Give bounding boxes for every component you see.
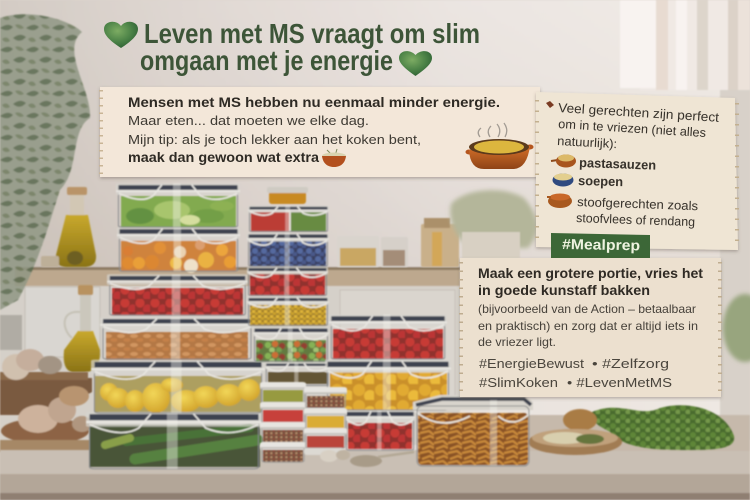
garlic and spoon [320, 450, 414, 467]
tips text: pastasauzen [579, 155, 656, 173]
icon: small bowl [322, 149, 346, 167]
oil bottle on shelf [41, 187, 96, 267]
container: oranges [117, 227, 240, 273]
intro text [128, 95, 500, 165]
containers: middle stack [325, 314, 533, 466]
container: red and green [248, 206, 329, 231]
icon: pasta sauce [551, 154, 576, 168]
container: yellow peas [247, 297, 329, 326]
hashtags: #SlimKoken [479, 375, 558, 390]
container: red fruit [247, 267, 328, 295]
tips text: stoofvlees of rendang [576, 211, 695, 229]
panel: intro note [100, 87, 540, 177]
panel: freezer tips [536, 92, 738, 250]
container: lasagna [413, 395, 533, 466]
herbs, onion and board [528, 405, 734, 455]
small round jars [260, 382, 414, 467]
icon: stew dish [547, 194, 572, 208]
icon: steaming pot [466, 123, 534, 169]
garlic and onions on wood [0, 349, 92, 452]
jar column right [304, 387, 347, 455]
advice body: de vriezer ligt. [478, 335, 556, 349]
container: mixed vegetables [253, 327, 329, 362]
advice heading [478, 266, 704, 298]
title line 2: omgaan met je energie [140, 45, 393, 76]
container: strawberries [329, 314, 447, 359]
plant: left tree [0, 14, 90, 350]
oil jug on cabinet [64, 285, 100, 372]
container: golden vegetables [325, 360, 451, 410]
container: lemons [91, 360, 265, 413]
advice body [478, 302, 698, 349]
tag: Mealprep: #Mealprep [562, 237, 640, 254]
container: strawberries low [345, 410, 415, 450]
title line 1: Leven met MS vraagt om slim [144, 18, 480, 49]
container: blueberries [247, 233, 329, 266]
container: strawberries [107, 274, 248, 315]
container: dark mix [265, 363, 329, 386]
icon: green heart [399, 51, 432, 76]
countertop [0, 415, 750, 500]
tag: Mealprep [551, 233, 650, 260]
tips text [557, 100, 720, 229]
advice body: (bijvoorbeeld van de Action – betaalbaar [478, 302, 696, 316]
containers: right stack [247, 187, 329, 386]
icon: green heart [104, 22, 138, 48]
icon: bullet [546, 101, 554, 108]
tips text: soepen [578, 173, 623, 189]
container: rice dish [100, 317, 254, 360]
jar column left [260, 382, 306, 462]
intro text: Mensen met MS hebben nu eenmaal minder energie. [128, 95, 500, 110]
advice heading: Maak een grotere portie, vries het [478, 266, 704, 281]
title [104, 18, 480, 76]
hashtags: #EnergieBewust [479, 356, 584, 371]
intro text: Mijn tip: als je toch lekker aan het koken bent, [128, 132, 421, 147]
tips text: om in te vriezen (niet alles [558, 117, 706, 140]
hashtags: • #LevenMetMS [567, 375, 672, 390]
containers: left stack [86, 183, 265, 469]
intro text: Maar eten... dat moeten we elke dag. [128, 113, 369, 128]
jars and plant on back shelf [337, 190, 537, 267]
advice heading: in goede kunstaff bakken [478, 283, 650, 298]
right plant [723, 294, 750, 362]
hashtags [479, 356, 672, 390]
container: cucumbers [86, 412, 262, 469]
advice body: en praktisch) en zorg dat er altijd iets in [478, 319, 698, 333]
tips text: Veel gerechten zijn perfect [558, 100, 720, 125]
tips text: natuurlijk): [557, 134, 617, 151]
container: greens [116, 183, 240, 227]
intro text: maak dan gewoon wat extra [128, 150, 320, 165]
icon: soup bowl [552, 174, 574, 186]
jar: orange sauce [267, 187, 308, 204]
panel: batch cooking advice [460, 258, 721, 397]
hashtags: • #Zelfzorg [592, 356, 669, 371]
tips text: stoofgerechten zoals [577, 195, 698, 213]
